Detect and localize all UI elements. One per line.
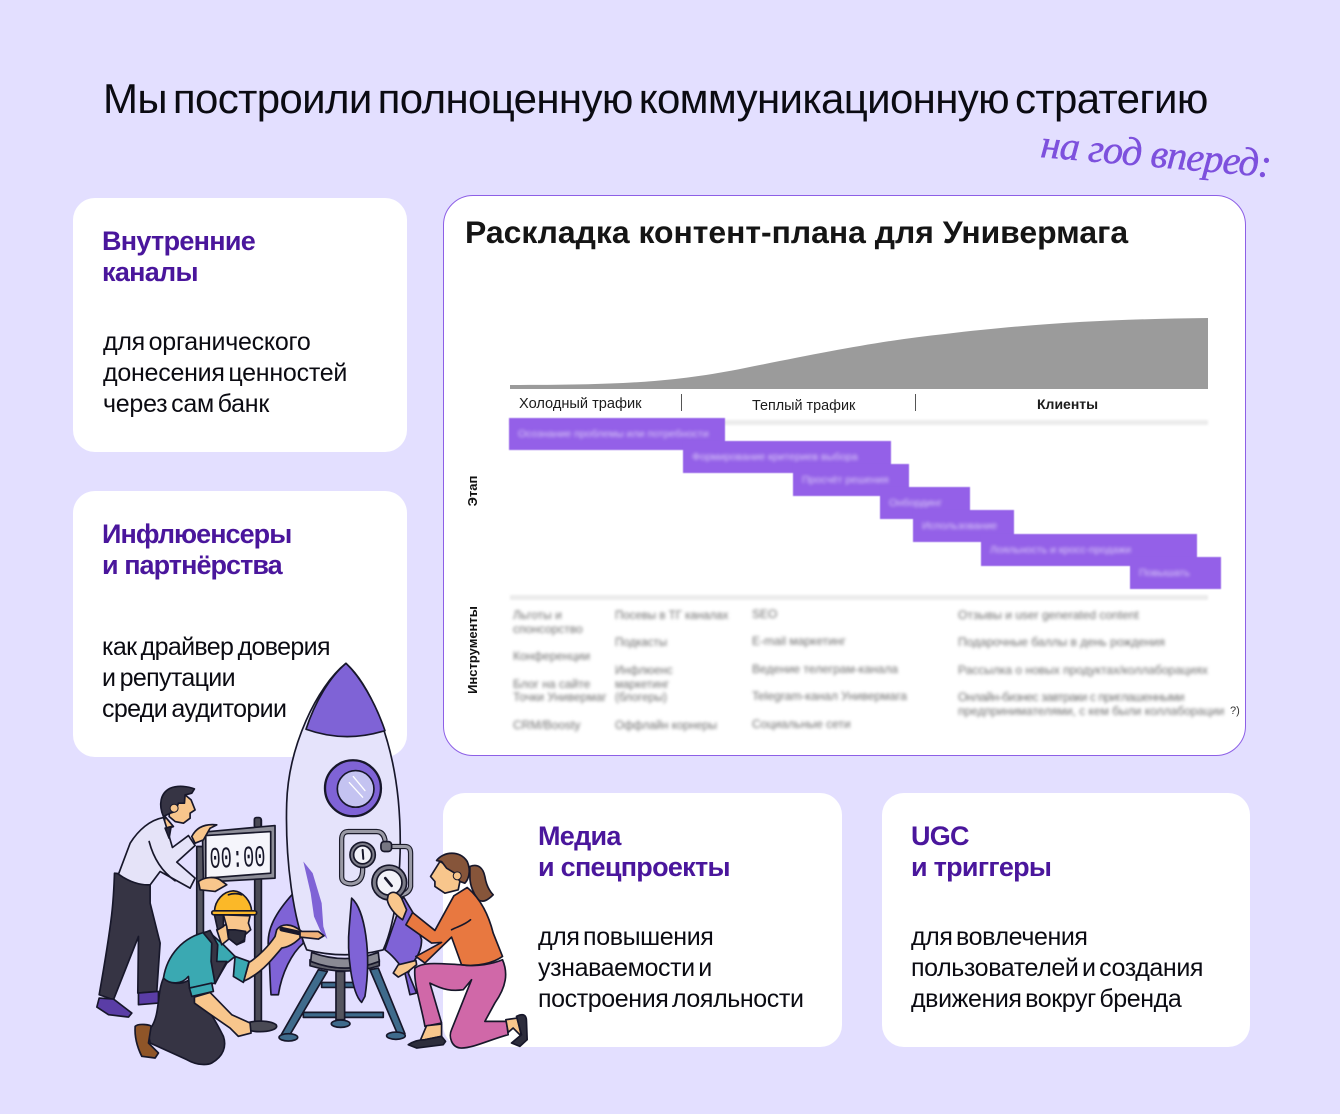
heading: media: и спецпроекты	[538, 852, 730, 882]
title: Мы построили полноценную коммуникационную стратегию	[103, 75, 1208, 122]
stage 5: Использование	[922, 520, 997, 532]
text: UGC: пользователей и создания	[911, 954, 1203, 982]
panel: media	[443, 793, 842, 1047]
rocket nose	[306, 663, 385, 737]
tools column 4	[956, 608, 1226, 718]
rocket window	[325, 760, 381, 816]
tools column 1: Точки Универмаг	[513, 690, 607, 704]
text: media: построения лояльности	[538, 985, 804, 1013]
heading: internal channels	[102, 226, 255, 287]
tools column 2: маркетинг	[615, 679, 669, 691]
axis label: tools: Инструменты	[465, 606, 480, 694]
stage 6: Лояльность и кросс-продажи	[990, 544, 1131, 556]
timer board	[202, 818, 275, 882]
tools column 4: Рассылка о новых продуктах/коллаборациях	[958, 663, 1208, 677]
tools column 3	[750, 607, 908, 732]
text: influencers: среди аудитории	[102, 695, 286, 723]
tools table	[512, 607, 1240, 733]
text: media	[538, 923, 804, 1013]
stage 1	[509, 418, 725, 450]
text: influencers: как драйвер доверия	[102, 633, 330, 661]
stage 6	[981, 534, 1197, 566]
rocket stand	[279, 952, 405, 1041]
heading: internal channels: каналы	[102, 257, 198, 287]
stage 3: Просчёт решения	[802, 474, 889, 486]
panel: UGC	[882, 793, 1250, 1047]
text: internal channels	[103, 328, 347, 418]
text: influencers: и репутации	[102, 664, 235, 692]
handwritten subtitle: на год вперед:	[1039, 121, 1273, 186]
tools column 3: SEO	[752, 607, 777, 621]
text: UGC	[911, 923, 1203, 1013]
rocket body	[286, 663, 400, 955]
text: UGC: для вовлечения	[911, 923, 1088, 951]
chart title: Раскладка контент-плана для Универмага	[465, 214, 1128, 250]
text: media: для повышения	[538, 923, 713, 951]
tools column 2	[614, 608, 730, 732]
tools column 2: (блогеры)	[615, 692, 667, 704]
heading: UGC: и триггеры	[911, 852, 1051, 882]
tools column 4: Подарочные баллы в день рождения	[958, 635, 1165, 649]
stage 3	[793, 464, 909, 496]
timer digits: 00:00	[209, 841, 266, 877]
text: internal channels: донесения ценностей	[103, 359, 347, 387]
stage 1: Осознание проблемы или потребности	[518, 428, 709, 440]
panel: content plan chart	[443, 195, 1246, 756]
panel: internal channels	[73, 198, 407, 452]
illustration: team building a rocket	[96, 662, 528, 1066]
tools column 4: предпринимателями, с кем были коллаборации	[958, 704, 1224, 718]
text: UGC: движения вокруг бренда	[911, 985, 1181, 1013]
man in white shirt	[97, 786, 227, 1017]
heading: media	[538, 821, 730, 882]
heading: internal channels: Внутренние	[102, 226, 255, 256]
rocket paint stripe	[303, 862, 327, 939]
label: clients: Клиенты	[1037, 396, 1098, 412]
heading: influencers: и партнёрства	[102, 550, 282, 580]
text: internal channels: для органического	[103, 328, 310, 356]
tools column 4: Онлайн-бизнес завтраки с приглашенными	[958, 690, 1184, 704]
stage 7	[1130, 557, 1221, 589]
tools column 2: Посевы в ТГ каналах	[615, 610, 728, 622]
text: internal channels: через сам банк	[103, 390, 269, 418]
text: media: узнаваемости и	[538, 954, 712, 982]
tools column 1	[512, 608, 608, 733]
tools column 3: Telegram-канал Универмага	[752, 689, 907, 703]
area chart: traffic volume	[510, 318, 1208, 389]
stage 2: Формирование критериев выбора	[692, 451, 858, 463]
label: warm traffic: Теплый трафик	[752, 398, 855, 414]
worker with helmet	[135, 891, 324, 1064]
heading: media: Медиа	[538, 821, 621, 851]
stage 5	[913, 510, 1014, 542]
tools note mark: ?)	[1230, 705, 1240, 717]
tools column 1: Блог на сайте	[513, 677, 590, 691]
axis label: stage: Этап	[465, 476, 480, 506]
tools column 1: CRM/Boosty	[513, 718, 580, 732]
panel: influencers	[73, 491, 407, 757]
tools column 2: Подкасты	[615, 637, 667, 649]
stage 4: Онбординг	[889, 497, 942, 509]
heading: UGC	[911, 821, 1051, 882]
heading: influencers: Инфлюенсеры	[102, 519, 291, 549]
timer stand	[197, 818, 277, 1032]
stage 4	[880, 487, 970, 519]
tools column 3: Социальные сети	[752, 717, 851, 731]
stage 7: Повышать	[1139, 567, 1190, 579]
rocket back fins	[268, 893, 422, 995]
funnel labels	[519, 394, 1098, 414]
gantt stages	[508, 417, 1222, 590]
label: cold traffic: Холодный трафик	[519, 396, 642, 412]
tools column 1: Конференции	[513, 649, 590, 663]
tools column 4: Отзывы и user generated content	[958, 608, 1139, 622]
rocket pipes and gauges	[342, 832, 411, 900]
tools column 3: E-mail маркетинг	[752, 634, 846, 648]
woman with gauge	[387, 853, 527, 1048]
text: influencers	[102, 633, 330, 723]
stage 2	[683, 441, 891, 473]
heading: UGC: UGC	[911, 821, 969, 851]
tools column 2: Инфлюенс	[615, 665, 673, 677]
tools column 1: спонсорство	[513, 622, 583, 636]
tools column 3: Ведение телеграм-канала	[752, 662, 898, 676]
tools column 2: Оффлайн корнеры	[615, 720, 717, 732]
tools column 1: Льготы и	[513, 608, 562, 622]
heading: influencers	[102, 519, 291, 580]
rocket centre fin	[349, 898, 368, 1002]
